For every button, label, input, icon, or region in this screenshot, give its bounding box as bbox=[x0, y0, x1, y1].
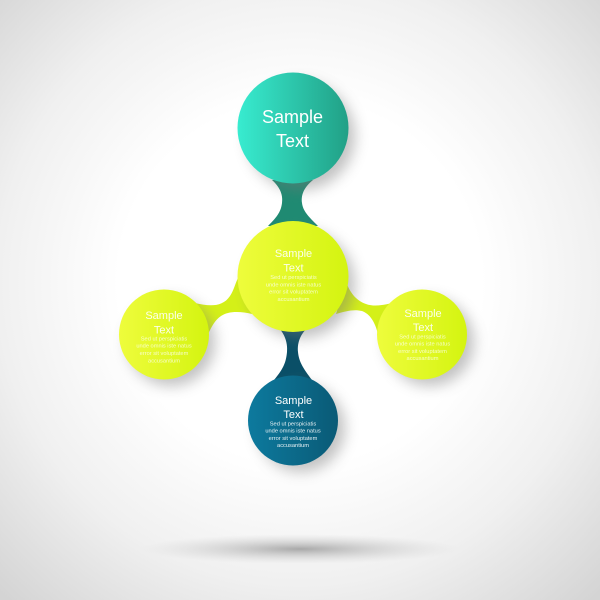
node body text: unde omnis iste natus bbox=[266, 282, 321, 288]
connector: centre to right bbox=[336, 282, 392, 334]
node body text: unde omnis iste natus bbox=[395, 342, 450, 348]
node body text: Sed ut perspiciatis bbox=[270, 275, 317, 281]
node body text: unde omnis iste natus bbox=[265, 428, 321, 434]
node heading: Sample bbox=[262, 107, 323, 127]
node body text: Sed ut perspiciatis bbox=[270, 422, 316, 428]
connector: centre to bottom bbox=[274, 325, 312, 380]
node body text: error sit voluptatem bbox=[269, 436, 318, 442]
node body text: Sed ut perspiciatis bbox=[141, 336, 187, 342]
node body text: accusantium bbox=[277, 443, 309, 449]
node body text: error sit voluptatem bbox=[140, 351, 189, 357]
node heading: Text bbox=[276, 131, 309, 151]
node heading: Sample bbox=[275, 248, 312, 260]
node heading: Text bbox=[283, 262, 304, 274]
node body text: error sit voluptatem bbox=[269, 290, 318, 296]
node body text: unde omnis iste natus bbox=[136, 344, 192, 350]
node heading: Text bbox=[283, 409, 304, 421]
node heading: Sample bbox=[404, 308, 442, 320]
node heading: Sample bbox=[275, 395, 312, 407]
node body text: error sit voluptatem bbox=[398, 349, 447, 355]
floor shadow bbox=[140, 534, 460, 564]
node: top teal circle bbox=[238, 72, 355, 190]
connector: centre to left bbox=[195, 278, 252, 334]
node: bottom blue circle bbox=[248, 376, 345, 472]
connector: top to centre bbox=[268, 180, 318, 226]
node body text: accusantium bbox=[278, 297, 310, 303]
node heading: Sample bbox=[145, 310, 183, 322]
node heading: Text bbox=[154, 324, 174, 336]
node: left lime circle bbox=[119, 290, 215, 386]
node body text: accusantium bbox=[407, 356, 439, 362]
node heading: Text bbox=[413, 322, 433, 334]
node body text: accusantium bbox=[148, 358, 180, 364]
node body text: Sed ut perspiciatis bbox=[399, 334, 446, 340]
node: right lime circle bbox=[377, 290, 474, 386]
node: centre lime circle bbox=[238, 221, 355, 338]
